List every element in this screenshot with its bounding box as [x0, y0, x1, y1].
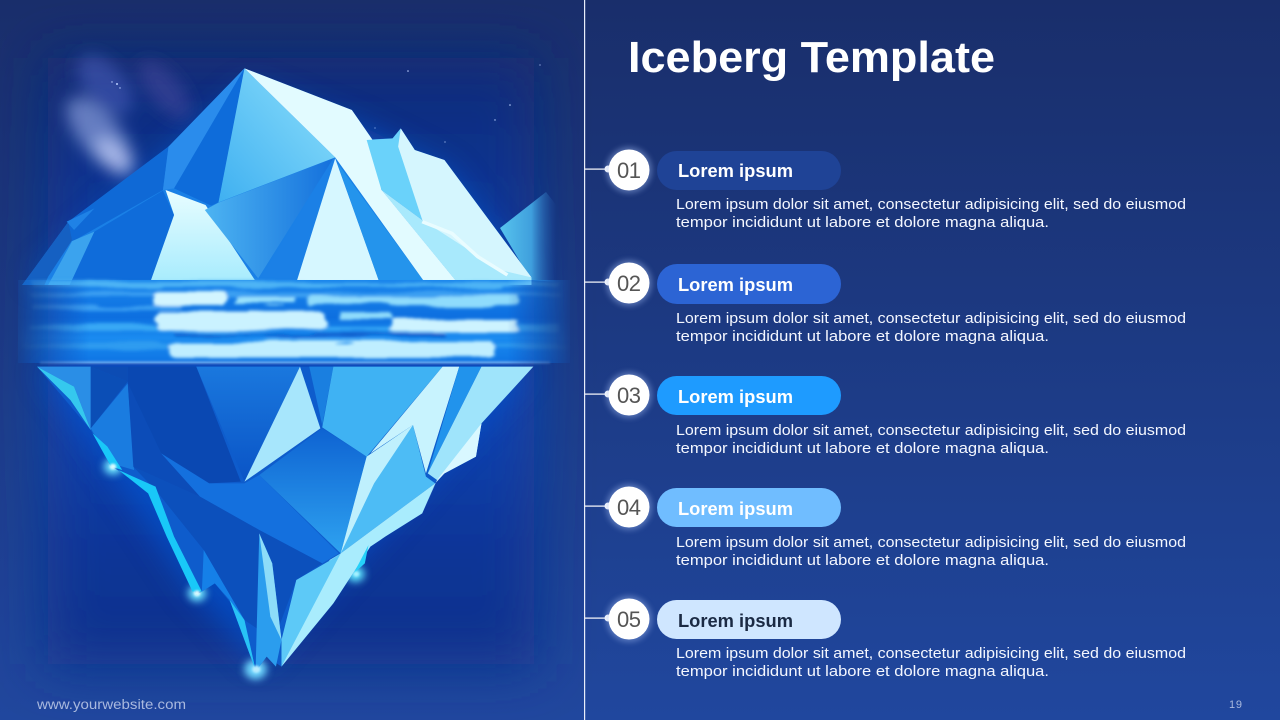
pill heading 03	[657, 376, 841, 415]
text block 01: Lorem ipsum dolor sit amet, consectetur adipisicing elit, sed do eiusmod	[676, 196, 1186, 213]
number badge 02	[606, 260, 652, 306]
pill heading 05: Lorem ipsum	[678, 610, 793, 631]
number badge 05	[606, 596, 652, 642]
text block 03: Lorem ipsum dolor sit amet, consectetur adipisicing elit, sed do eiusmod	[676, 422, 1186, 439]
number badge 04: 04	[617, 495, 641, 520]
text block 05: Lorem ipsum dolor sit amet, consectetur adipisicing elit, sed do eiusmod	[676, 645, 1186, 662]
stars	[111, 64, 541, 143]
number badge 02: 02	[617, 271, 641, 296]
number badge 05: 05	[617, 607, 641, 632]
text block 04: Lorem ipsum dolor sit amet, consectetur adipisicing elit, sed do eiusmod	[676, 534, 1186, 551]
night sky and deep water backdrop	[48, 58, 534, 664]
text block 03: tempor incididunt ut labore et dolore magna aliqua.	[676, 440, 1049, 457]
text block 05: tempor incididunt ut labore et dolore magna aliqua.	[676, 663, 1049, 680]
connector 04	[585, 502, 612, 510]
pill heading 04: Lorem ipsum	[678, 498, 793, 519]
page number: 19	[1229, 699, 1242, 711]
item 04	[585, 484, 1186, 569]
number badge 03	[606, 372, 652, 418]
item 02	[585, 260, 1186, 345]
milky way	[55, 45, 200, 183]
item 05	[585, 596, 1186, 680]
text block 02	[676, 310, 1186, 345]
pill heading 05	[657, 600, 841, 639]
text block 02: Lorem ipsum dolor sit amet, consectetur adipisicing elit, sed do eiusmod	[676, 310, 1186, 327]
connector 02	[585, 278, 612, 286]
pill heading 01: Lorem ipsum	[678, 160, 793, 181]
connector 03	[585, 390, 612, 398]
pill heading 02	[657, 264, 841, 304]
footer website: www.yourwebsite.com	[36, 697, 186, 712]
iceberg above water	[22, 68, 531, 285]
connector 01	[585, 166, 612, 172]
title: Iceberg Template	[628, 33, 995, 82]
water surface and reflections	[18, 280, 570, 364]
item 03	[585, 372, 1186, 457]
glow behind iceberg	[30, 85, 530, 665]
illustration: iceberg	[18, 45, 570, 679]
pill heading 04	[657, 488, 841, 527]
text block 04	[676, 534, 1186, 569]
iceberg below water	[37, 367, 533, 679]
glow tips	[104, 459, 122, 475]
number badge 01	[606, 147, 652, 193]
text block 05	[676, 645, 1186, 680]
number badge 04	[606, 484, 652, 530]
text block 04: tempor incididunt ut labore et dolore magna aliqua.	[676, 552, 1049, 569]
pill heading 01	[657, 151, 841, 190]
text block 02: tempor incididunt ut labore et dolore magna aliqua.	[676, 328, 1049, 345]
item 01	[585, 147, 1186, 231]
text block 03	[676, 422, 1186, 457]
number badge 03: 03	[617, 383, 641, 408]
text block 01	[676, 196, 1186, 231]
connector 05	[585, 614, 612, 622]
small distant iceberg	[500, 192, 557, 282]
text block 01: tempor incididunt ut labore et dolore magna aliqua.	[676, 214, 1049, 231]
number badge 01: 01	[617, 158, 641, 183]
pill heading 03: Lorem ipsum	[678, 386, 793, 407]
divider line	[584, 0, 585, 720]
pill heading 02: Lorem ipsum	[678, 274, 793, 295]
